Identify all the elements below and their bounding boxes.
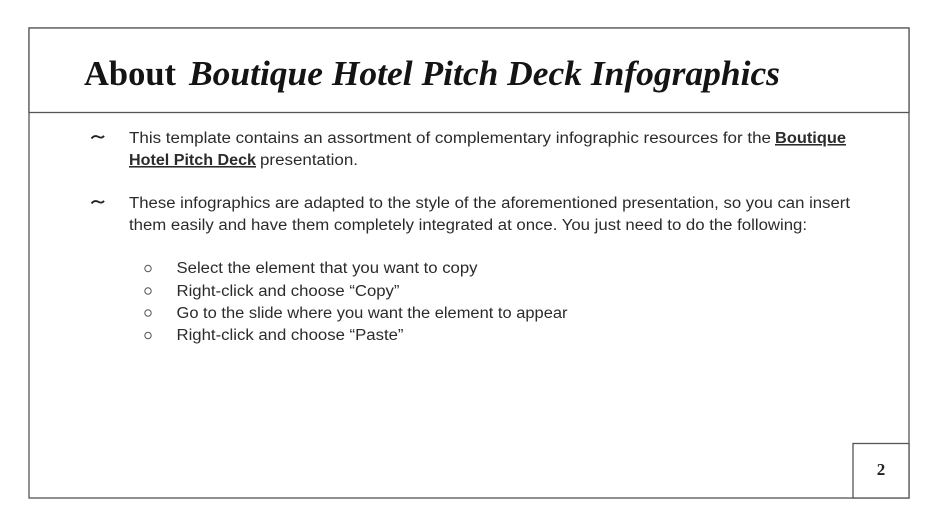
paragraph 2: them easily and have them completely integrated at once. You just need to do the following: [129,217,807,234]
paragraph 2 [129,195,851,234]
page number box: 2 [877,460,885,479]
title panel [29,28,909,112]
title: Boutique Hotel Pitch Deck Infographics [188,54,780,93]
step list [145,260,568,344]
bullet: paragraph 2 [92,201,104,204]
step 2: Right-click and choose “Copy” [176,283,400,300]
page number box [853,444,909,498]
body text [92,130,851,344]
paragraph 1: Boutique [775,130,846,147]
bullet: paragraph 1 [92,136,104,138]
paragraph 1: This template contains an assortment of complementary infographic resources for the [129,130,771,147]
paragraph 1 [129,130,846,169]
paragraph 1: presentation. [260,152,358,169]
paragraph 2: These infographics are adapted to the style of the aforementioned presentation, so you can insert [129,195,851,212]
step 3: Go to the slide where you want the element to appear [176,305,568,322]
step 4: Right-click and choose “Paste” [176,327,404,344]
step 1: Select the element that you want to copy [176,260,478,277]
title: About [84,54,176,93]
paragraph 1: Hotel Pitch Deck [129,152,256,169]
